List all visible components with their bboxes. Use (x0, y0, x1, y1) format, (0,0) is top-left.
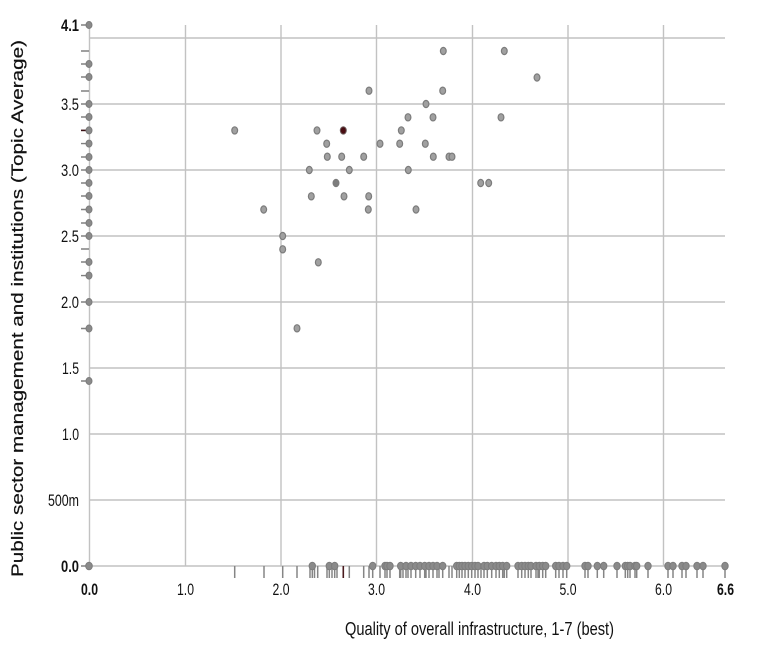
x axis marginal dots (309, 562, 728, 570)
x axis labels: 0.0 (81, 580, 98, 599)
y axis marginal dots (86, 22, 92, 570)
y axis labels: 3.0 (61, 161, 79, 180)
x axis labels: 4.0 (464, 580, 481, 599)
x axis rug ticks (235, 566, 725, 578)
y axis labels: 500m (48, 491, 79, 510)
scatter points (232, 47, 540, 332)
x axis labels: 3.0 (368, 580, 385, 599)
x axis labels (81, 580, 734, 599)
y axis highlighted tick (81, 129, 89, 131)
y axis labels: 1.0 (62, 425, 79, 444)
x axis labels: 6.0 (655, 580, 672, 599)
y axis title: Public sector management and institutions (Topic Average) (9, 40, 27, 577)
x axis title: Quality of overall infrastructure, 1-7 (best) (345, 619, 614, 639)
x axis labels: 1.0 (177, 580, 194, 599)
y axis labels: 4.1 (61, 16, 79, 35)
y axis labels: 0.0 (61, 557, 79, 576)
y axis labels: 3.5 (61, 95, 79, 114)
y axis rug ticks (81, 25, 89, 566)
x axis highlighted tick (342, 566, 344, 578)
x axis labels: 2.0 (272, 580, 290, 599)
y axis labels: 1.5 (62, 359, 79, 378)
highlighted scatter point (340, 127, 346, 134)
y axis labels: 2.0 (61, 293, 79, 312)
x axis labels: 6.6 (717, 580, 734, 599)
y axis labels (48, 16, 79, 576)
x axis labels: 5.0 (560, 580, 576, 599)
y axis labels: 2.5 (61, 227, 79, 246)
